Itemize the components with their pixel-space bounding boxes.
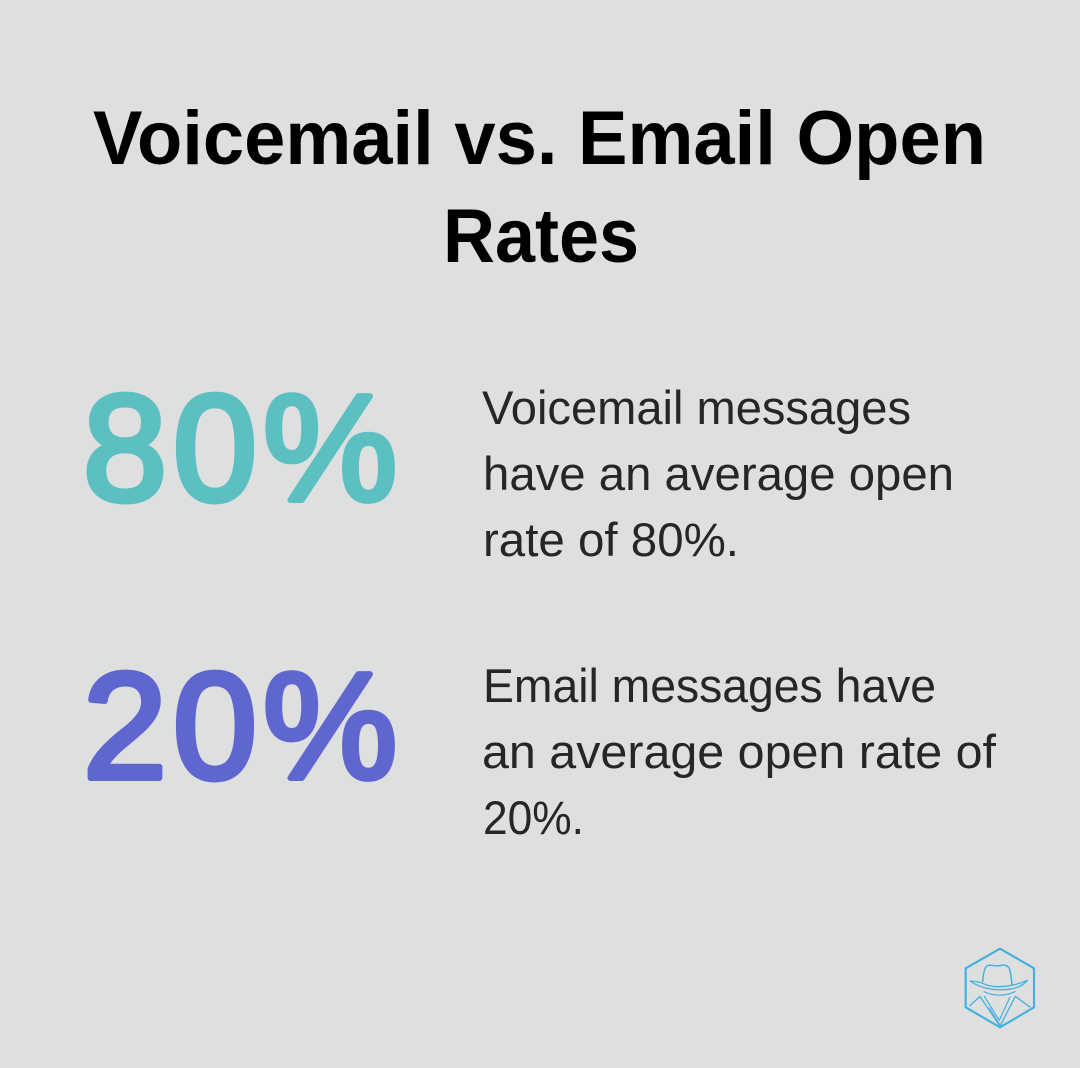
text block: email description: an average open rate of [482, 726, 997, 779]
title [93, 96, 986, 279]
statistic: 20%: 20% [83, 641, 397, 810]
text block: email description [482, 660, 997, 845]
icon: hexagon logo with hat [966, 949, 1034, 1027]
title: Voicemail vs. Email Open [93, 96, 986, 181]
text block: voicemail description [482, 382, 954, 567]
text block: email description: 20%. [483, 792, 584, 845]
text block: voicemail description: rate of 80%. [483, 514, 739, 567]
statistic: 80%: 80% [83, 363, 397, 532]
text block: email description: Email messages have [483, 660, 936, 713]
text block: voicemail description: have an average open [483, 448, 954, 501]
text block: voicemail description: Voicemail messages [482, 382, 911, 435]
title: Rates [443, 194, 639, 279]
